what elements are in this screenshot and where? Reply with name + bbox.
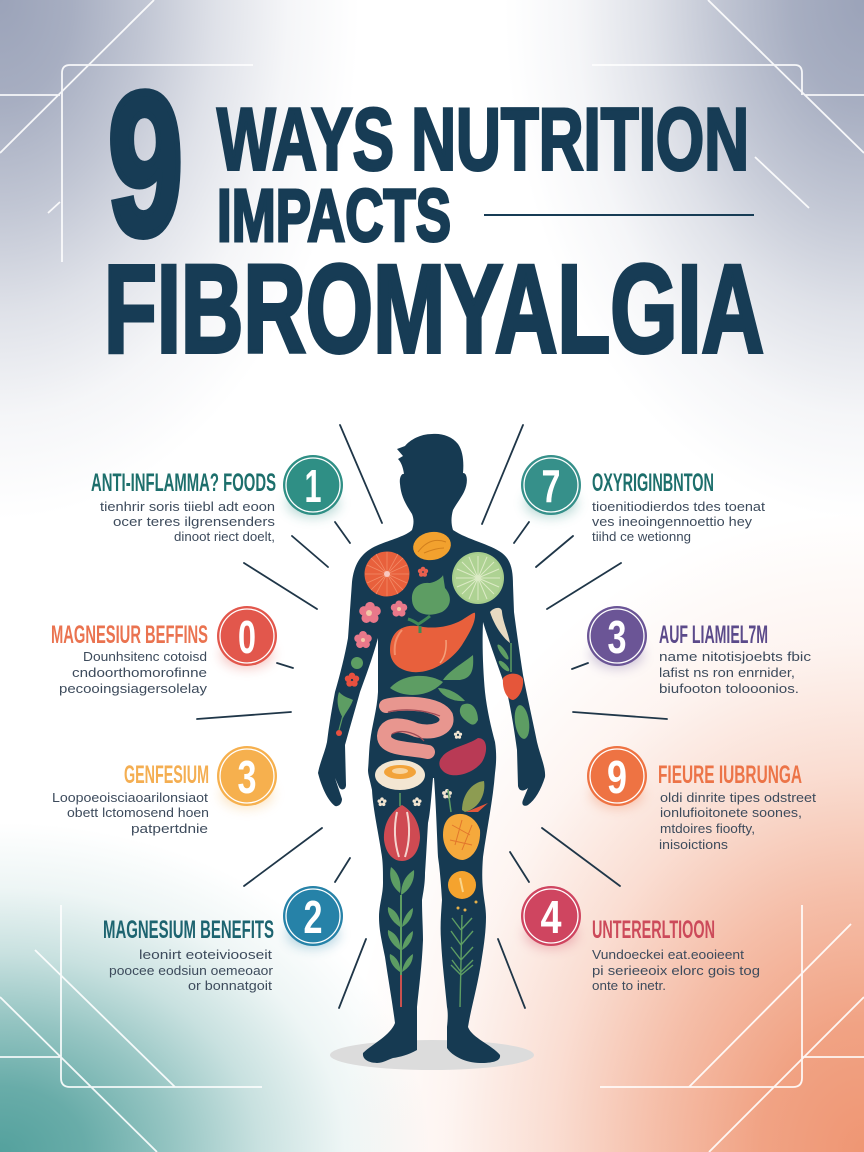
- badge 3 purple: 3: [608, 611, 626, 663]
- item 3 purple: [587, 606, 812, 696]
- badge 4: 4: [540, 891, 562, 943]
- item 2: [103, 886, 343, 993]
- item 3 amber: [52, 746, 277, 836]
- heading 0: MAGNESIUR BEFFINS: [51, 621, 208, 649]
- title: [104, 51, 764, 379]
- body text 7: tiihd ce wetionng: [592, 529, 691, 544]
- body text 1: [100, 499, 276, 544]
- badge 0: 0: [238, 611, 256, 663]
- badge 3 purple: [587, 606, 647, 668]
- body text 7: [592, 499, 765, 544]
- heading 3 amber: GENFESIUM: [124, 761, 209, 789]
- pink flowers: [354, 567, 428, 648]
- body text 0: pecooingsiagersolelay: [59, 681, 208, 696]
- heading 1: ANTI-INFLAMMA? FOODS: [91, 469, 276, 497]
- body text 9: oldi dinrite tipes odstreet: [660, 790, 816, 805]
- body text 4: [592, 947, 760, 993]
- body text 0: [59, 649, 208, 696]
- beetroot and leaf: [439, 704, 486, 775]
- body text 2: poocee eodsiun oemeoaor: [109, 963, 274, 978]
- body text 2: [109, 947, 274, 993]
- radiating lines: [197, 425, 667, 1008]
- lime slice: [452, 552, 504, 604]
- badge 1: 1: [304, 460, 322, 512]
- badge 9: 9: [607, 751, 627, 803]
- body text 3 amber: [52, 790, 209, 836]
- heading 2: MAGNESIUM BENEFITS: [103, 916, 274, 944]
- body text 2: leonirt eoteiviooseit: [139, 947, 272, 962]
- body text 4: Vundoeckei eat.eooieent: [592, 947, 744, 962]
- orange circle: [448, 871, 476, 899]
- badge 4: [521, 886, 581, 948]
- badge 2: [283, 886, 343, 948]
- green leaves: [390, 655, 473, 701]
- body text 3 purple: lafist ns ron enrnider,: [659, 665, 795, 680]
- badge 9: [587, 746, 647, 808]
- body text 3 purple: [659, 649, 812, 696]
- badge 1: [283, 455, 343, 517]
- body text 7: tioenitiodierdos tdes toenat: [592, 499, 765, 514]
- body text 9: [659, 790, 816, 852]
- item 4: [521, 886, 760, 993]
- title rule: [484, 214, 754, 216]
- body text 9: inisoictions: [659, 837, 729, 852]
- body text 1: tienhrir soris tiiebl adt eoon: [100, 499, 275, 514]
- body text 9: ionlufioitonete soones,: [660, 805, 802, 820]
- badge 3 amber: [217, 746, 277, 808]
- body text 0: Dounhsitenc cotoisd: [83, 649, 207, 664]
- badge 3 amber: 3: [238, 751, 256, 803]
- bun: [375, 760, 425, 790]
- body text 3 amber: obett lctomosend hoen: [67, 805, 209, 820]
- left arm plants: [336, 657, 363, 736]
- right arm plant and berry: [490, 608, 531, 740]
- body text 4: pi serieeoix elorc gois tog: [592, 963, 760, 978]
- badge 7: [521, 455, 581, 517]
- item 1: [91, 455, 343, 544]
- body text 2: or bonnatgoit: [188, 978, 272, 993]
- badge 2: 2: [304, 891, 322, 943]
- body text 9: mtdoires fioofty,: [660, 821, 755, 836]
- right leg herb: [451, 900, 478, 1007]
- body text 0: cndoorthomorofinne: [72, 665, 207, 680]
- orange seed: [411, 529, 453, 563]
- body text 3 purple: biufooton tolooonios.: [659, 681, 799, 696]
- food items inside body: [336, 529, 531, 1007]
- item 9: [587, 746, 816, 852]
- title: impacts: IMPACTS: [217, 174, 451, 257]
- intestines: [384, 704, 447, 752]
- olive leaf and red sprig: [448, 781, 488, 812]
- heading 3 purple: AUF LIAMIEL7M: [659, 621, 768, 649]
- body text 1: ocer teres ilgrensenders: [113, 514, 276, 529]
- body silhouette: [318, 434, 545, 1063]
- body text 4: onte to inetr.: [592, 978, 666, 993]
- striped red fruit: [384, 793, 420, 861]
- item 0: [51, 606, 277, 696]
- small white flowers: [377, 731, 462, 806]
- large tomato: [390, 613, 475, 672]
- badge 0: [217, 606, 277, 668]
- body text 7: ves ineoingennoettio hey: [592, 514, 753, 529]
- badge 7: 7: [542, 460, 560, 512]
- heading 7: OXYRIGINBNTON: [592, 469, 714, 497]
- body text 3 amber: Loopoeoisciaoarilonsiaot: [52, 790, 208, 805]
- ground shadow: [330, 1040, 534, 1070]
- title: big 9: 9: [108, 51, 183, 278]
- body text 1: dinoot riect doelt,: [174, 529, 275, 544]
- item 7: [521, 455, 765, 544]
- body text 3 amber: patpertdnie: [131, 821, 208, 836]
- body text 3 purple: name nitotisjoebts fbic: [659, 649, 812, 664]
- tomato slice: [364, 552, 410, 596]
- left leg leaf stem: [388, 867, 414, 1007]
- mango: [443, 814, 480, 860]
- heading 4: UNTERERLTIOON: [592, 916, 715, 944]
- green cabbage leaf: [412, 575, 450, 615]
